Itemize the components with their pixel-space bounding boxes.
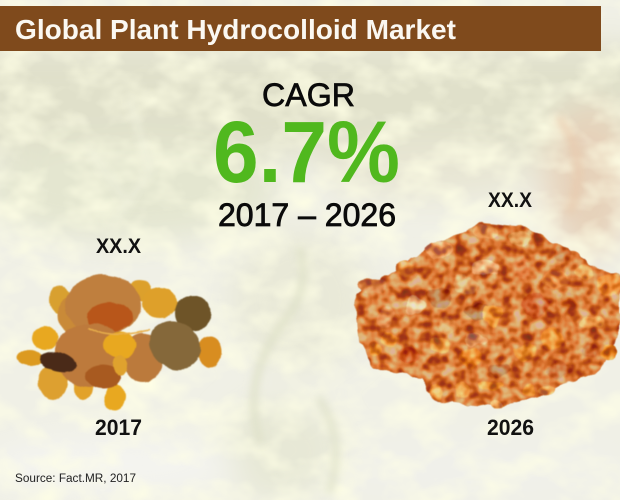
period: 2017 – 2026 <box>218 197 396 233</box>
title: Global Plant Hydrocolloid Market <box>15 14 456 45</box>
title banner <box>0 6 601 51</box>
icon: large gum pile 2026 <box>355 223 620 409</box>
icon: small gum pile 2017 <box>17 275 222 410</box>
2026 value label: XX.X <box>488 189 532 212</box>
2017 year label: 2017 <box>95 415 142 440</box>
2026 year label: 2026 <box>487 415 534 440</box>
CAGR label: CAGR <box>262 77 355 113</box>
CAGR value: 6.7% <box>213 104 400 201</box>
2017 value label: XX.X <box>96 235 141 258</box>
source note: Source: Fact.MR, 2017 <box>15 473 136 485</box>
